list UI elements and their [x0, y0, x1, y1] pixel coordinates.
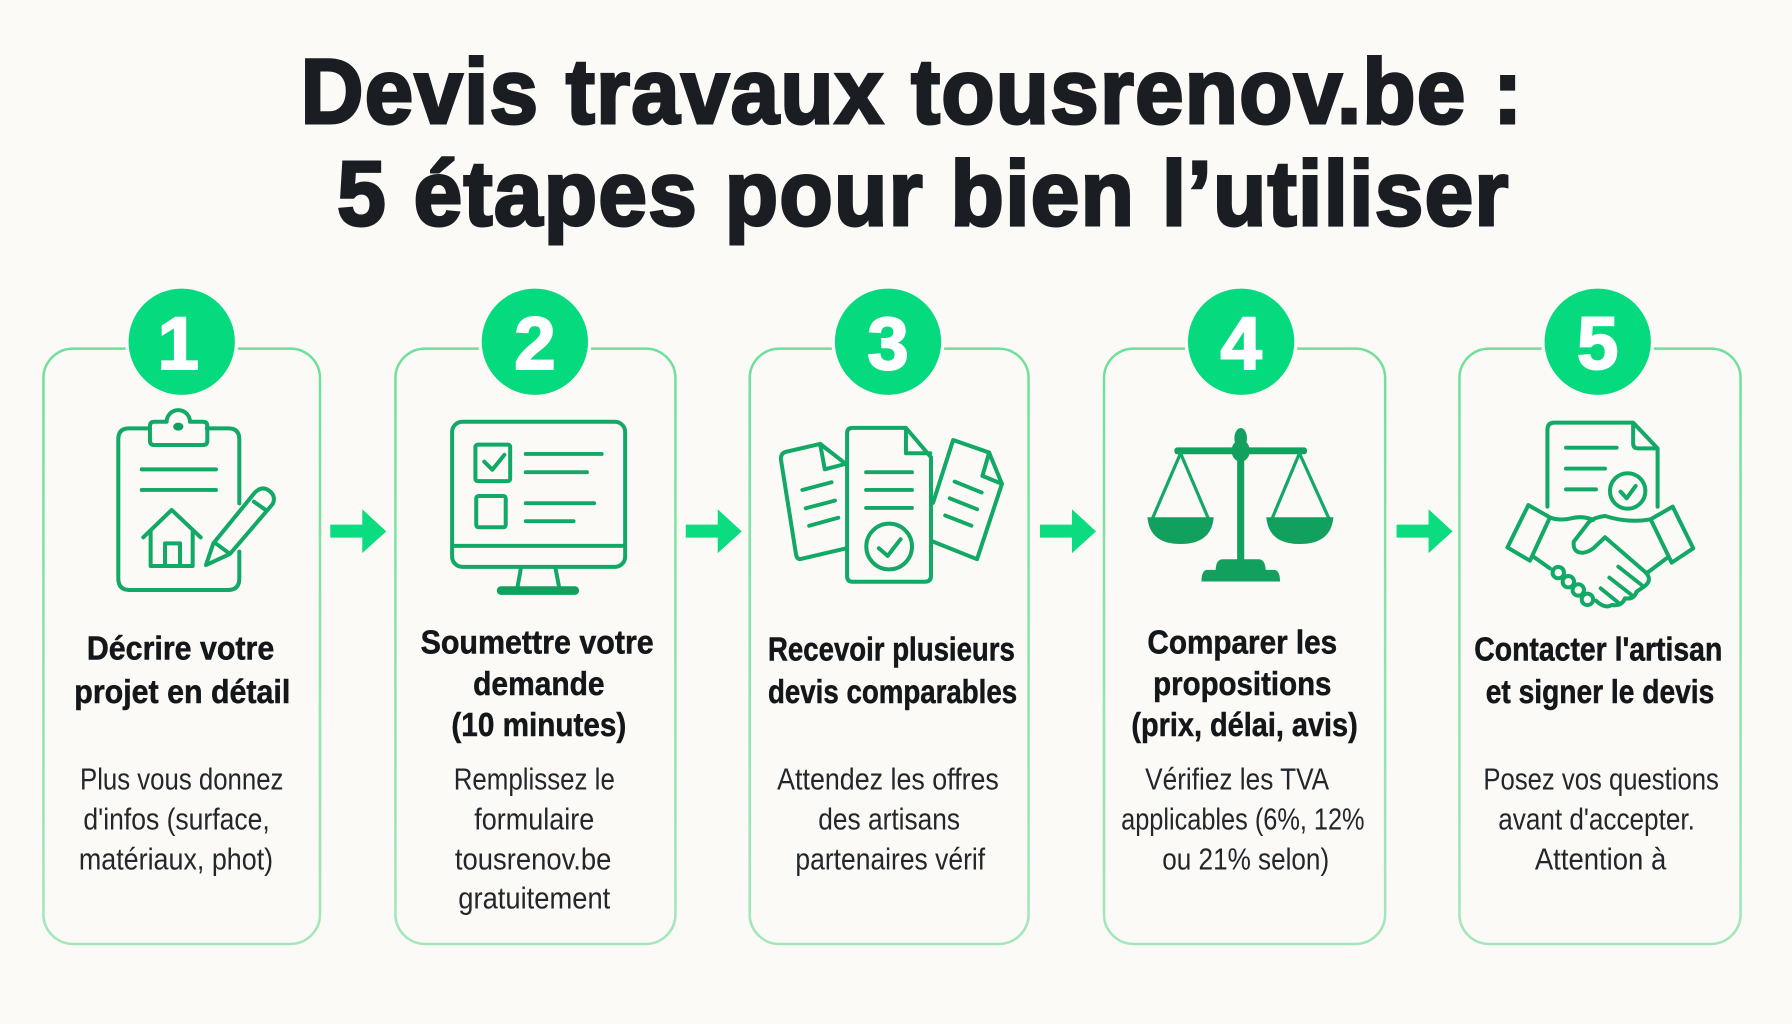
step 4 description: Vérifiez les TVA — [1145, 764, 1330, 797]
step 3 description: partenaires vérif — [795, 844, 986, 877]
step 3 description: Attendez les offres — [777, 764, 999, 797]
step 1 description: d'infos (surface, — [83, 804, 270, 837]
step 3 heading: devis comparables — [768, 674, 1017, 711]
step 5 heading — [1474, 632, 1722, 711]
title: Devis travaux tousrenov.be : — [301, 41, 1523, 143]
arrow: step 3 to 4 — [1040, 509, 1096, 553]
step 1 heading: projet en détail — [74, 674, 290, 711]
step 4 description — [1121, 764, 1365, 877]
step 2 number badge: 2 — [514, 302, 556, 385]
step 4 heading: (prix, délai, avis) — [1131, 707, 1358, 744]
step 4 description: ou 21% selon) — [1162, 844, 1329, 877]
arrow: step 1 to 2 — [330, 509, 386, 553]
step 1 description: matériaux, phot) — [79, 844, 273, 877]
step 4 number badge — [1186, 287, 1296, 397]
step 2 heading — [421, 625, 654, 744]
icon: clipboard with house and pencil — [118, 410, 274, 590]
step 1 number badge: 1 — [158, 302, 199, 385]
panel: step 2 — [395, 287, 675, 944]
title — [301, 41, 1523, 245]
arrow: step 4 to 5 — [1397, 509, 1453, 553]
step 2 description — [454, 764, 615, 916]
panel: step 1 — [43, 287, 320, 944]
step 5 number badge: 5 — [1577, 302, 1618, 385]
step 1 heading: Décrire votre — [87, 630, 274, 667]
icon: computer monitor with checklist — [452, 422, 625, 595]
step 4 heading: propositions — [1153, 666, 1331, 703]
step 5 description: avant d'accepter. — [1498, 804, 1695, 837]
panel: step 4 — [1104, 287, 1385, 944]
step 4 heading: Comparer les — [1147, 625, 1337, 662]
step 5 heading: et signer le devis — [1486, 674, 1714, 711]
step 4 heading — [1131, 625, 1358, 744]
step 5 heading: Contacter l'artisan — [1474, 632, 1722, 669]
step 2 number badge — [480, 287, 590, 397]
step 1 number badge — [127, 287, 237, 397]
step 3 heading — [768, 632, 1017, 711]
icon: balance scales — [1147, 428, 1333, 581]
step 2 heading: demande — [473, 666, 605, 703]
step 3 description — [777, 764, 999, 877]
step 5 description: Posez vos questions — [1483, 764, 1719, 797]
step 2 description: gratuitement — [458, 883, 611, 916]
panel: step 5 — [1459, 287, 1741, 944]
step 5 description — [1483, 764, 1719, 877]
step 1 description — [79, 764, 283, 877]
title: 5 étapes pour bien l’utiliser — [337, 143, 1510, 245]
step 1 heading — [74, 630, 290, 711]
step 5 number badge — [1543, 287, 1653, 397]
step 2 heading: (10 minutes) — [451, 707, 626, 744]
step 4 number badge: 4 — [1220, 302, 1262, 385]
step 2 description: Remplissez le — [454, 764, 615, 797]
step 3 heading: Recevoir plusieurs — [768, 632, 1015, 669]
icon: three documents — [781, 428, 1002, 582]
arrow: step 2 to 3 — [686, 509, 742, 553]
step 2 description: tousrenov.be — [455, 844, 611, 877]
step 3 description: des artisans — [818, 804, 960, 837]
icon: signed document and handshake — [1507, 423, 1693, 606]
step 2 heading: Soumettre votre — [421, 625, 654, 662]
step 4 description: applicables (6%, 12% — [1121, 804, 1365, 837]
step 3 number badge: 3 — [867, 302, 909, 385]
step 2 description: formulaire — [474, 804, 594, 837]
panel: step 3 — [750, 287, 1029, 944]
step 3 number badge — [833, 287, 943, 397]
step 5 description: Attention à — [1535, 844, 1666, 877]
step 1 description: Plus vous donnez — [80, 764, 283, 797]
